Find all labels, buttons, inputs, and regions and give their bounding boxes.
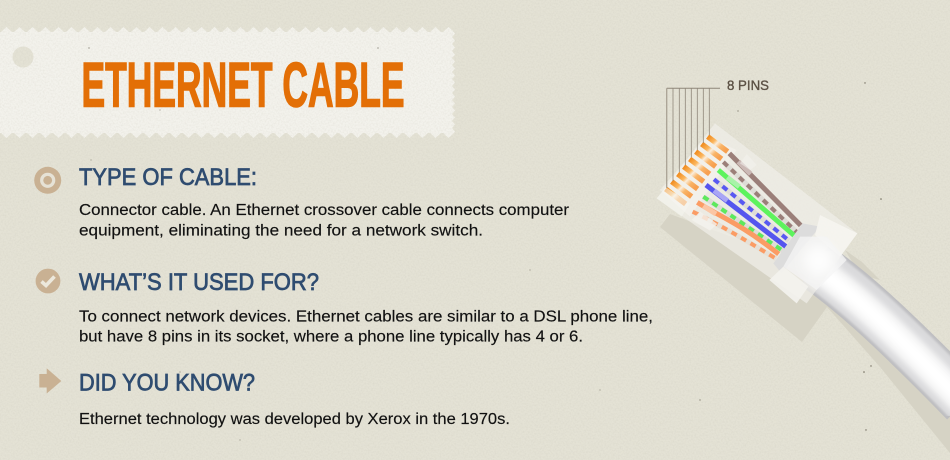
text: type of cable: equipment, eliminating the need for a network switch. <box>79 222 483 240</box>
icon: arrow <box>39 368 61 394</box>
title: ETHERNET CABLE <box>82 51 404 121</box>
text: type of cable <box>79 202 569 240</box>
heading: what's it used for: WHAT’S IT USED FOR? <box>79 269 319 296</box>
plug highlights <box>657 154 857 303</box>
text: what's it used for: To connect network devices. Ethernet cables are similar to a DSL phone line, <box>79 308 653 326</box>
heading: type of cable: TYPE OF CABLE: <box>79 164 257 191</box>
shadow of plug and cable <box>660 214 950 453</box>
title tag <box>0 27 455 138</box>
text: what's it used for: but have 8 pins in its socket, where a phone line typically has 4 or 6. <box>79 328 583 346</box>
wires <box>693 153 801 259</box>
gold pins <box>666 137 728 204</box>
illustration: ethernet plug and cable <box>657 123 950 453</box>
label: 8 pins: 8 PINS <box>727 78 769 93</box>
icon: target <box>34 167 61 194</box>
heading: did you know: DID YOU KNOW? <box>79 370 255 397</box>
text: what's it used for <box>79 308 653 346</box>
icon: check mark <box>36 269 60 293</box>
text: type of cable: Connector cable. An Ethernet crossover cable connects computer <box>79 202 569 219</box>
text: did you know: Ethernet technology was developed by Xerox in the 1970s. <box>79 411 510 428</box>
pin callout lines <box>667 88 720 188</box>
plug body <box>657 123 857 303</box>
paper specks <box>88 47 882 441</box>
cable <box>815 265 950 404</box>
